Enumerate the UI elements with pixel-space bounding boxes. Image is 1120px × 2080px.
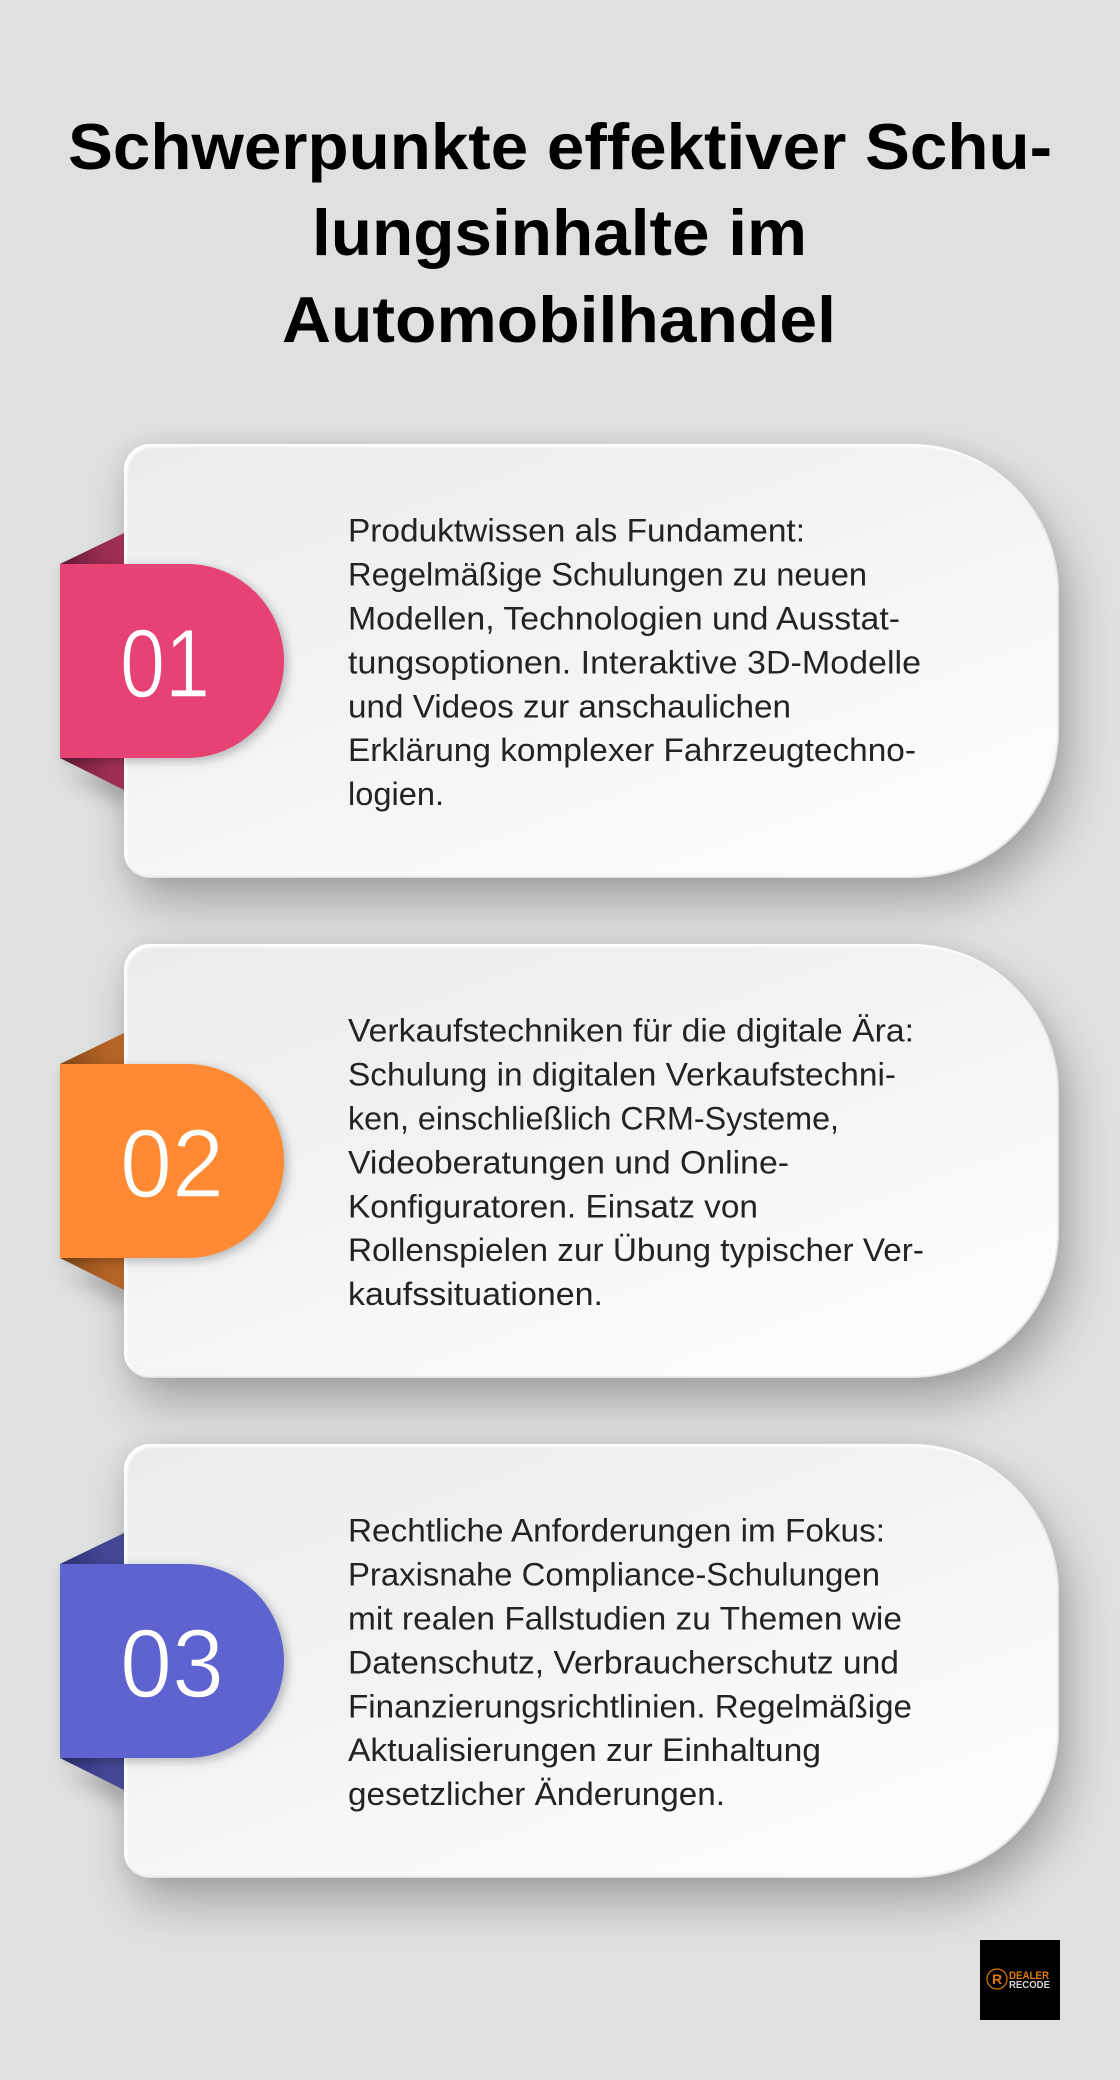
text: Verkaufstechniken für die digitale Ära: kaufssituationen. bbox=[348, 1276, 603, 1312]
text: Produktwissen als Fundament: Modellen, Technologien und Ausstat- bbox=[348, 600, 900, 636]
number badge 03 bbox=[60, 1564, 284, 1758]
text: Rechtliche Anforderungen im Fokus bbox=[348, 1513, 912, 1812]
text: Rechtliche Anforderungen im Fokus: Aktualisierungen zur Einhaltung bbox=[348, 1732, 821, 1768]
text: Rechtliche Anforderungen im Fokus: Praxisnahe Compliance-Schulungen bbox=[348, 1557, 880, 1593]
logo: Dealer Recode bbox=[980, 1940, 1060, 2020]
text: Verkaufstechniken für die digitale Ära: Konfiguratoren. Einsatz von bbox=[348, 1188, 758, 1224]
ribbon folds: pink bbox=[60, 533, 124, 808]
text: Produktwissen als Fundament: und Videos zur anschaulichen bbox=[348, 688, 791, 724]
text: Rechtliche Anforderungen im Fokus: mit realen Fallstudien zu Themen wie bbox=[348, 1600, 902, 1636]
text: Produktwissen als Fundament bbox=[348, 513, 921, 812]
number badge 02 bbox=[60, 1064, 284, 1258]
title: lungsinhalte im bbox=[312, 196, 807, 269]
text: Rechtliche Anforderungen im Fokus: Rechtliche Anforderungen im Fokus: bbox=[348, 1513, 885, 1549]
card: Verkaufstechniken bbox=[124, 944, 1059, 1378]
ribbon folds: indigo bbox=[60, 1533, 124, 1808]
text: Rechtliche Anforderungen im Fokus: Datenschutz, Verbraucherschutz und bbox=[348, 1644, 899, 1680]
panel: Produktwissen bbox=[58, 436, 1092, 926]
card: Rechtliche Anforderungen bbox=[124, 1444, 1059, 1878]
text: Produktwissen als Fundament: Erklärung komplexer Fahrzeugtechno- bbox=[348, 732, 916, 768]
ribbon folds: orange bbox=[60, 1033, 124, 1308]
number 01: 01 bbox=[120, 609, 210, 718]
number 02: 02 bbox=[120, 1109, 224, 1218]
text: Verkaufstechniken für die digitale Ära: ken, einschließlich CRM-Systeme, bbox=[348, 1100, 839, 1136]
number badge 01 bbox=[60, 564, 284, 758]
title: Automobilhandel bbox=[282, 283, 836, 356]
card: Produktwissen bbox=[124, 444, 1059, 878]
logo: Dealer Recode: RECODE bbox=[1009, 1980, 1050, 1991]
text: Produktwissen als Fundament: Produktwissen als Fundament: bbox=[348, 513, 805, 549]
panel: Rechtliche Anforderungen bbox=[58, 1436, 1092, 1926]
text: Produktwissen als Fundament: tungsoptionen. Interaktive 3D-Modelle bbox=[348, 644, 921, 680]
text: Verkaufstechniken für die digitale Ära: Rollenspielen zur Übung typischer Ver- bbox=[348, 1232, 924, 1268]
text: Verkaufstechniken für die digitale Ära: Verkaufstechniken für die digitale Ära: bbox=[348, 1013, 914, 1049]
logo: Dealer Recode: R bbox=[992, 1971, 1002, 1987]
text: Verkaufstechniken für die digitale Ära: Videoberatungen und Online- bbox=[348, 1144, 789, 1180]
title bbox=[68, 110, 1052, 356]
number 03: 03 bbox=[120, 1609, 224, 1718]
text: Rechtliche Anforderungen im Fokus: Finanzierungsrichtlinien. Regelmäßige bbox=[348, 1688, 912, 1724]
text: Produktwissen als Fundament: logien. bbox=[348, 776, 444, 812]
logo: Dealer Recode: DEALER bbox=[1009, 1970, 1049, 1982]
panel: Verkaufstechniken bbox=[58, 936, 1092, 1426]
text: Produktwissen als Fundament: Regelmäßige Schulungen zu neuen bbox=[348, 557, 867, 593]
text: Verkaufstechniken für die digitale Ära bbox=[348, 1013, 924, 1312]
text: Rechtliche Anforderungen im Fokus: gesetzlicher Änderungen. bbox=[348, 1776, 725, 1812]
title: Schwerpunkte effektiver Schu- bbox=[68, 110, 1052, 183]
text: Verkaufstechniken für die digitale Ära: Schulung in digitalen Verkaufstechni- bbox=[348, 1057, 896, 1093]
